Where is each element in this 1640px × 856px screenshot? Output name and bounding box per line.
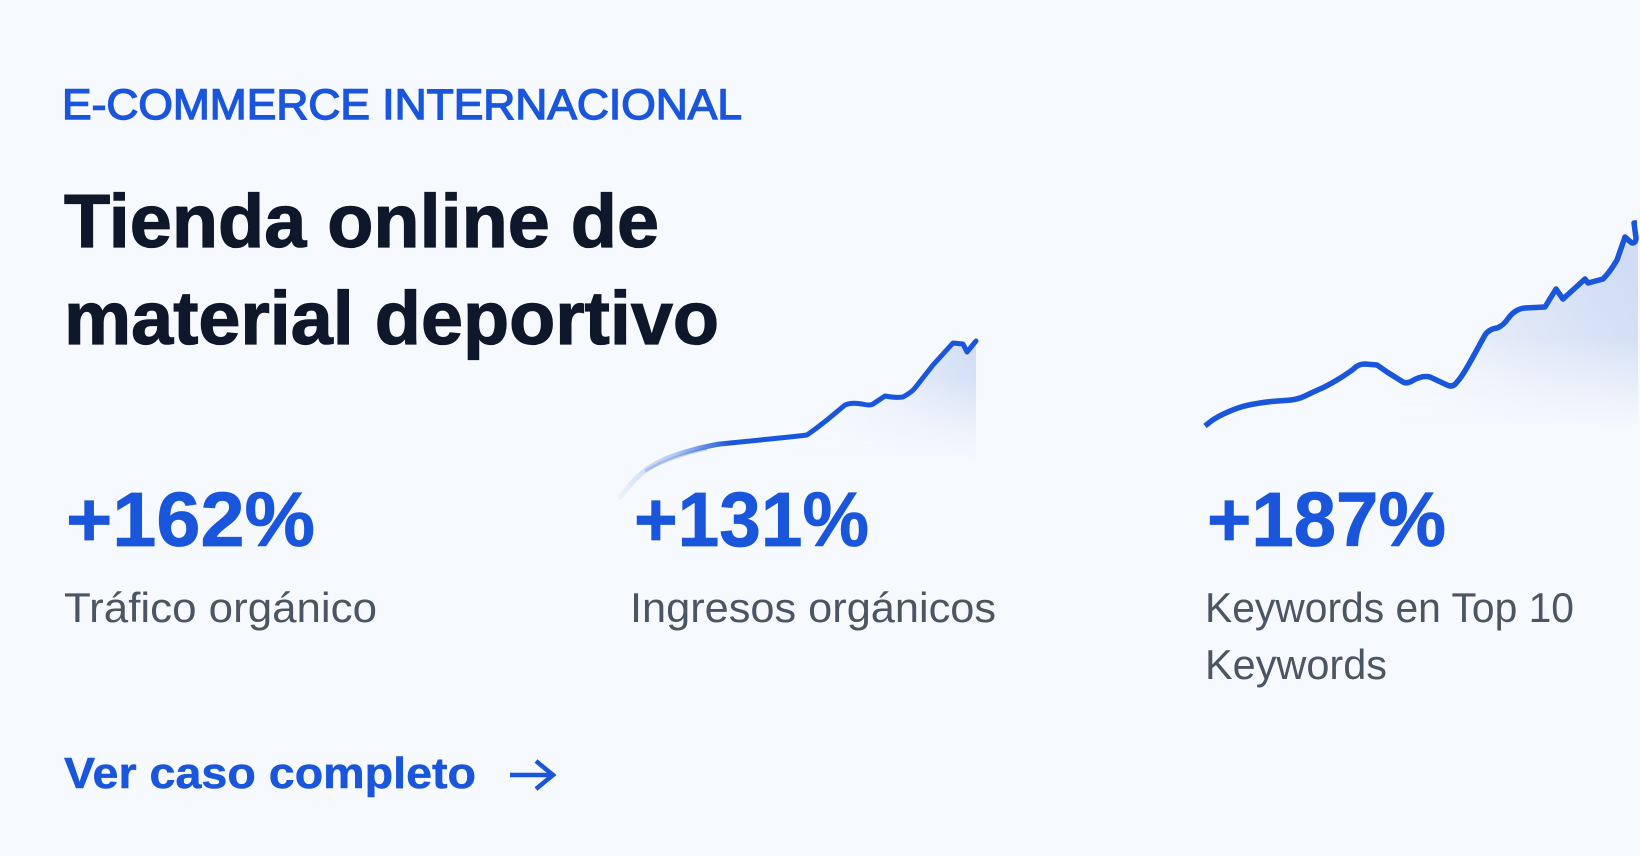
stat: ingresos orgánicos bbox=[630, 477, 996, 631]
case study card bbox=[64, 88, 1639, 798]
stat: tráfico orgánico bbox=[64, 477, 377, 631]
chart: keywords en top 10 bbox=[1205, 223, 1638, 430]
icon: arrow bbox=[510, 761, 553, 789]
stat: tráfico orgánico: Tráfico orgánico bbox=[64, 584, 377, 631]
stat: tráfico orgánico: +162% bbox=[66, 477, 315, 563]
eyebrow label: E-COMMERCE INTERNACIONAL bbox=[62, 81, 742, 129]
title bbox=[64, 179, 719, 360]
title: Tienda online de bbox=[64, 179, 659, 263]
link: ver caso completo: Ver caso completo bbox=[64, 749, 476, 798]
stat: keywords en top 10: +187% bbox=[1207, 477, 1446, 563]
title: material deportivo bbox=[64, 276, 719, 360]
stat: keywords en top 10: Keywords bbox=[1205, 641, 1387, 688]
stat: ingresos orgánicos: Ingresos orgánicos bbox=[630, 584, 996, 631]
stat: ingresos orgánicos: +131% bbox=[634, 477, 869, 563]
stat: keywords en top 10: Keywords en Top 10 bbox=[1205, 584, 1574, 631]
chart: ingresos orgánicos bbox=[620, 341, 976, 497]
stat: keywords en top 10 bbox=[1205, 477, 1574, 688]
